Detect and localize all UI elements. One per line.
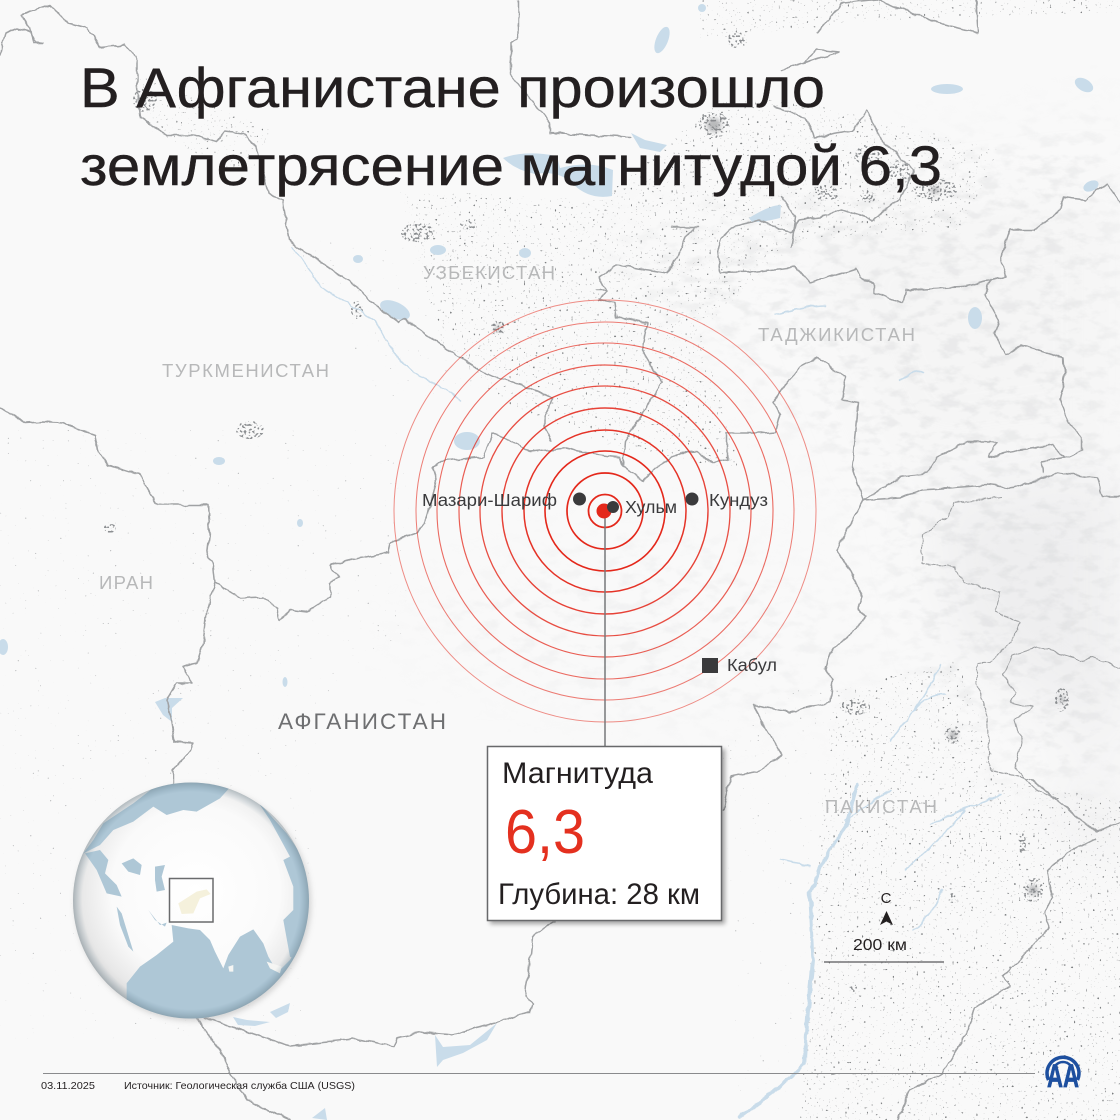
north arrow: С [881, 890, 892, 907]
title [80, 56, 942, 197]
country labels: ИРАН [99, 572, 153, 593]
date: 03.11.2025 [41, 1080, 95, 1092]
city: Khulm: Хульм [625, 497, 677, 517]
title: В Афганистане произошло [80, 56, 825, 119]
country labels: ТУРКМЕНИСТАН [162, 360, 329, 381]
city: Kabul [702, 655, 777, 675]
city: Mazar-i-Sharif: Мазари-Шариф [422, 490, 557, 510]
country labels: УЗБЕКИСТАН [423, 262, 555, 283]
callout: magnitude and depth: Глубина: 28 км [498, 878, 700, 911]
city: Kunduz: Кундуз [709, 490, 768, 510]
scale bar [824, 937, 944, 962]
city: Kabul: Кабул [727, 655, 777, 675]
seismic rings [394, 300, 816, 722]
title: землетрясение магнитудой 6,3 [80, 134, 942, 197]
logo: Anadolu Agency [1047, 1057, 1079, 1094]
leader line [604, 511, 606, 746]
city: Kunduz [686, 490, 768, 510]
globe seas [84, 782, 309, 1018]
source: Источник: Геологическая служба США (USGS) [124, 1080, 355, 1092]
epicenter dot [596, 504, 612, 518]
country labels: АФГАНИСТАН [278, 709, 446, 734]
footer rule [43, 1072, 1035, 1074]
callout: magnitude and depth [488, 746, 725, 924]
callout: magnitude and depth: 6,3 [505, 798, 585, 867]
logo: Anadolu Agency: AA [1047, 1058, 1079, 1094]
Afghanistan highlight [178, 889, 211, 914]
locator square [170, 878, 213, 922]
locator globe [73, 780, 317, 1037]
country labels: ПАКИСТАН [825, 796, 937, 817]
north arrow [880, 890, 893, 925]
country labels [99, 262, 937, 817]
scale bar: 200 км [853, 937, 907, 954]
callout: magnitude and depth: Магнитуда [502, 757, 653, 790]
country labels: ТАДЖИКИСТАН [758, 324, 915, 345]
